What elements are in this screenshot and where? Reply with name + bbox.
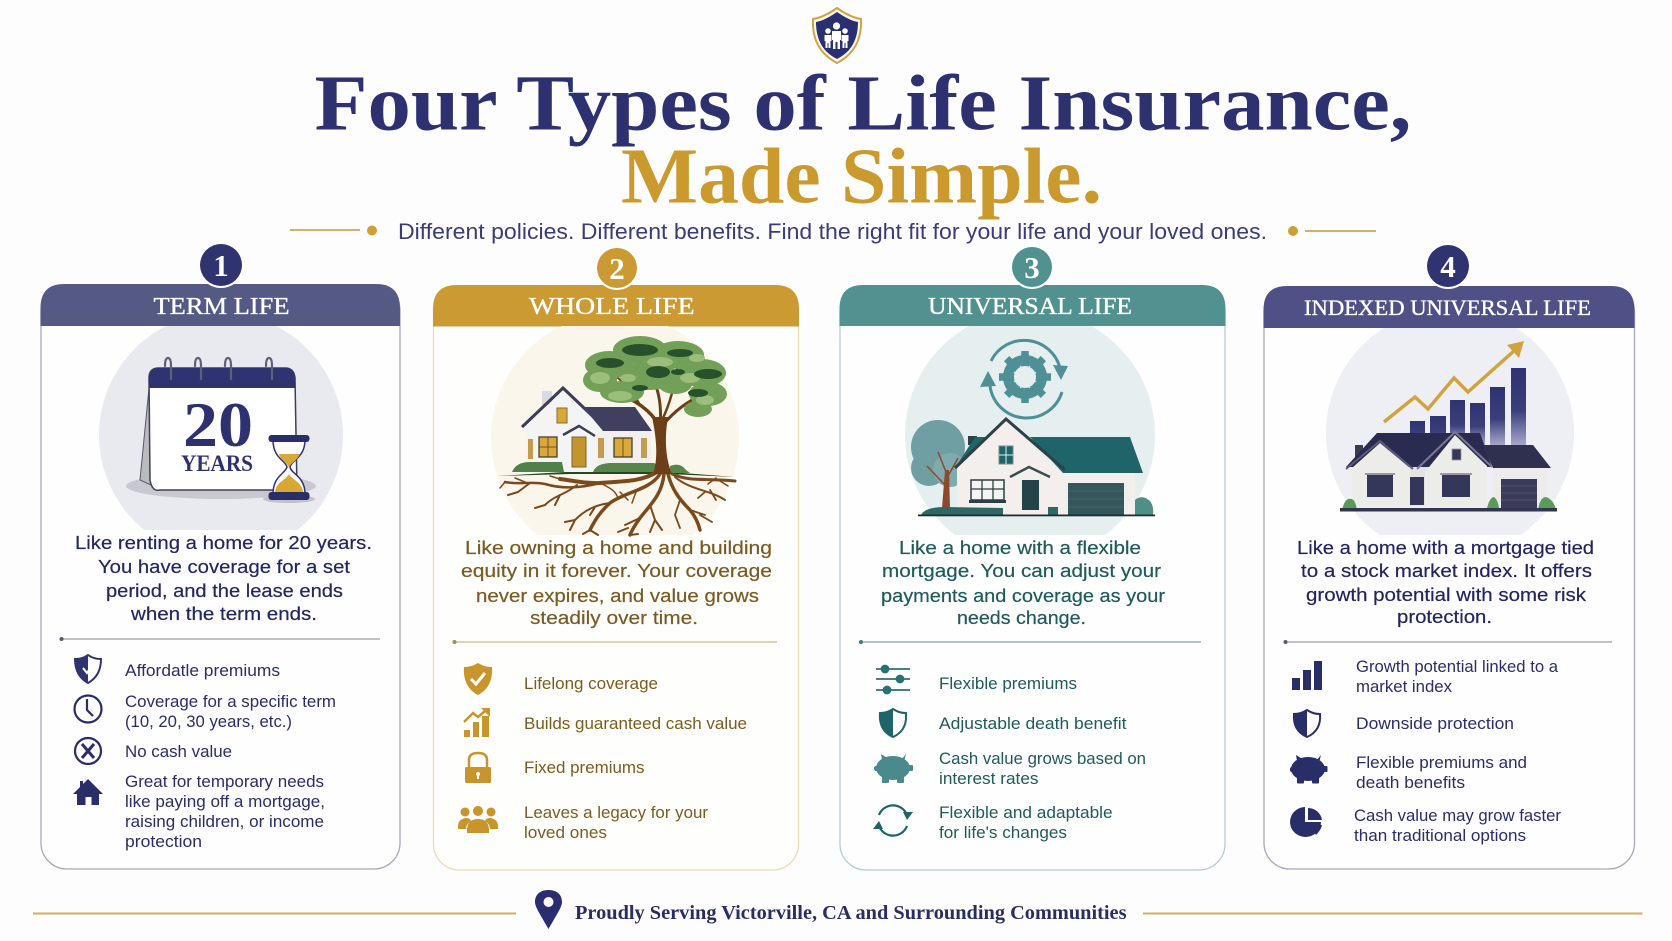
description: indexed universal life: Like a home with a mortgage tied	[1297, 537, 1594, 558]
description: indexed universal life: growth potential with some risk	[1306, 584, 1587, 605]
title	[314, 60, 1412, 220]
icon: shield check	[75, 655, 101, 683]
feature list: whole life	[524, 675, 747, 842]
feature list: universal life: for life's changes	[939, 824, 1067, 842]
header bar: term life	[40, 284, 400, 326]
footer	[33, 890, 1642, 929]
feature list: indexed universal life: Growth potential linked to a	[1356, 658, 1559, 676]
description: whole life	[461, 537, 772, 628]
feature list: whole life: Builds guaranteed cash value	[524, 715, 747, 733]
heading: indexed universal life: INDEXED UNIVERSAL LIFE	[1304, 295, 1591, 320]
number badge 2	[595, 246, 639, 290]
illustration: calendar and hourglass: YEARS	[181, 451, 253, 476]
description: whole life: steadily over time.	[530, 607, 698, 628]
description: universal life: mortgage. You can adjust your	[882, 560, 1161, 581]
description: universal life	[881, 537, 1165, 628]
description: whole life: never expires, and value grows	[476, 585, 759, 606]
feature list: term life: Coverage for a specific term	[125, 693, 336, 711]
feature list: universal life: Adjustable death benefit	[939, 715, 1127, 733]
icon: location pin	[535, 890, 562, 929]
feature list: term life: raising children, or income	[125, 813, 324, 831]
illustration: calendar and hourglass	[99, 326, 343, 530]
number badge 1	[198, 242, 244, 288]
description: term life	[75, 532, 372, 624]
description: indexed universal life: protection.	[1397, 606, 1492, 627]
description: universal life: payments and coverage as your	[881, 585, 1165, 606]
description: universal life: Like a home with a flexible	[899, 537, 1141, 558]
icon: house	[73, 779, 103, 805]
panel: universal life	[840, 245, 1226, 870]
feature list: indexed universal life: market index	[1356, 678, 1453, 696]
icon: piggy bank	[1290, 755, 1328, 784]
footer text: Proudly Serving Victorville, CA and Surrounding Communities	[575, 902, 1127, 924]
description: term life: You have coverage for a set	[98, 556, 350, 577]
panel: whole life	[433, 246, 799, 870]
gear and cycle arrows	[980, 340, 1068, 418]
description: term life: period, and the lease ends	[106, 580, 343, 601]
feature list: whole life: loved ones	[524, 824, 607, 842]
icon: clock	[74, 696, 102, 722]
rising bars	[1410, 368, 1526, 445]
feature list: term life: Affordatle premiums	[125, 662, 280, 680]
icon: family shield logo	[813, 8, 861, 63]
illustration: house and tree with roots	[491, 326, 739, 537]
feature list: term life: Great for temporary needs	[125, 773, 324, 791]
feature list: term life	[125, 662, 336, 851]
icon: pie chart	[1290, 807, 1322, 837]
description: term life: Like renting a home for 20 years.	[75, 532, 372, 553]
icon: sliders	[876, 666, 910, 694]
title: Made Simple.	[621, 134, 1102, 220]
description: indexed universal life: to a stock market index. It offers	[1301, 560, 1592, 581]
feature list: term life: (10, 20, 30 years, etc.)	[125, 713, 292, 731]
feature list: universal life: Flexible and adaptable	[939, 804, 1113, 822]
number badge 4	[1425, 243, 1471, 289]
subtitle with ornaments: Different policies. Different benefits. Find the right fit for your life and your loved ones.	[398, 219, 1267, 244]
feature list: whole life: Fixed premiums	[524, 759, 644, 777]
tree	[911, 420, 967, 508]
feature list: universal life: Cash value grows based on	[939, 750, 1146, 768]
feature list: indexed universal life: Cash value may grow faster	[1354, 807, 1561, 825]
icon: padlock	[465, 753, 491, 783]
feature list: term life: No cash value	[125, 743, 232, 761]
icon: half shield	[880, 709, 906, 737]
icon: x in circle	[75, 738, 101, 764]
description: whole life: Like owning a home and building	[465, 537, 772, 558]
feature list: indexed universal life: Downside protection	[1356, 715, 1514, 733]
feature list: whole life: Leaves a legacy for your	[524, 804, 709, 822]
title: Four Types of Life Insurance,	[314, 60, 1412, 148]
icon: piggy bank	[874, 754, 913, 783]
illustration: house with rising chart	[1326, 328, 1574, 535]
feature list: indexed universal life: Flexible premiums and	[1356, 754, 1527, 772]
number badge 1: 1	[213, 248, 229, 283]
feature list: universal life: interest rates	[939, 770, 1038, 788]
feature list: indexed universal life: than traditional options	[1354, 827, 1526, 845]
number badge 3	[1010, 245, 1054, 289]
heading: term life: TERM LIFE	[154, 294, 290, 320]
feature list: whole life: Lifelong coverage	[524, 675, 658, 693]
number badge 2: 2	[609, 251, 625, 286]
feature list: indexed universal life	[1354, 658, 1561, 845]
description: whole life: equity in it forever. Your coverage	[461, 560, 772, 581]
gold arrow	[1384, 341, 1524, 422]
icon: shield check	[464, 663, 492, 695]
header bar: whole life	[433, 285, 799, 326]
description: indexed universal life	[1297, 537, 1594, 627]
icon: cycle arrows	[873, 805, 913, 836]
illustration: house with gear	[905, 326, 1155, 535]
number badge 3: 3	[1024, 250, 1040, 285]
feature list: universal life: Flexible premiums	[939, 675, 1077, 693]
feature list: universal life	[939, 675, 1146, 842]
icon: half shield	[1294, 710, 1320, 737]
feature list: indexed universal life: death benefits	[1356, 774, 1465, 792]
icon: family group	[458, 806, 498, 833]
icon: growth chart	[464, 708, 490, 737]
panel: indexed universal life	[1264, 243, 1634, 869]
description: term life: when the term ends.	[130, 603, 317, 624]
number badge 4: 4	[1440, 249, 1456, 284]
feature list: term life: like paying off a mortgage,	[125, 793, 325, 811]
illustration: calendar and hourglass: 20	[183, 389, 253, 460]
heading: whole life: WHOLE LIFE	[529, 294, 694, 320]
header bar: indexed universal life	[1264, 286, 1634, 328]
icon: bars	[1292, 661, 1322, 690]
description: universal life: needs change.	[957, 607, 1086, 628]
header bar: universal life	[840, 285, 1226, 326]
feature list: term life: protection	[125, 833, 202, 851]
heading: universal life: UNIVERSAL LIFE	[928, 294, 1132, 320]
panel: term life	[40, 242, 400, 869]
